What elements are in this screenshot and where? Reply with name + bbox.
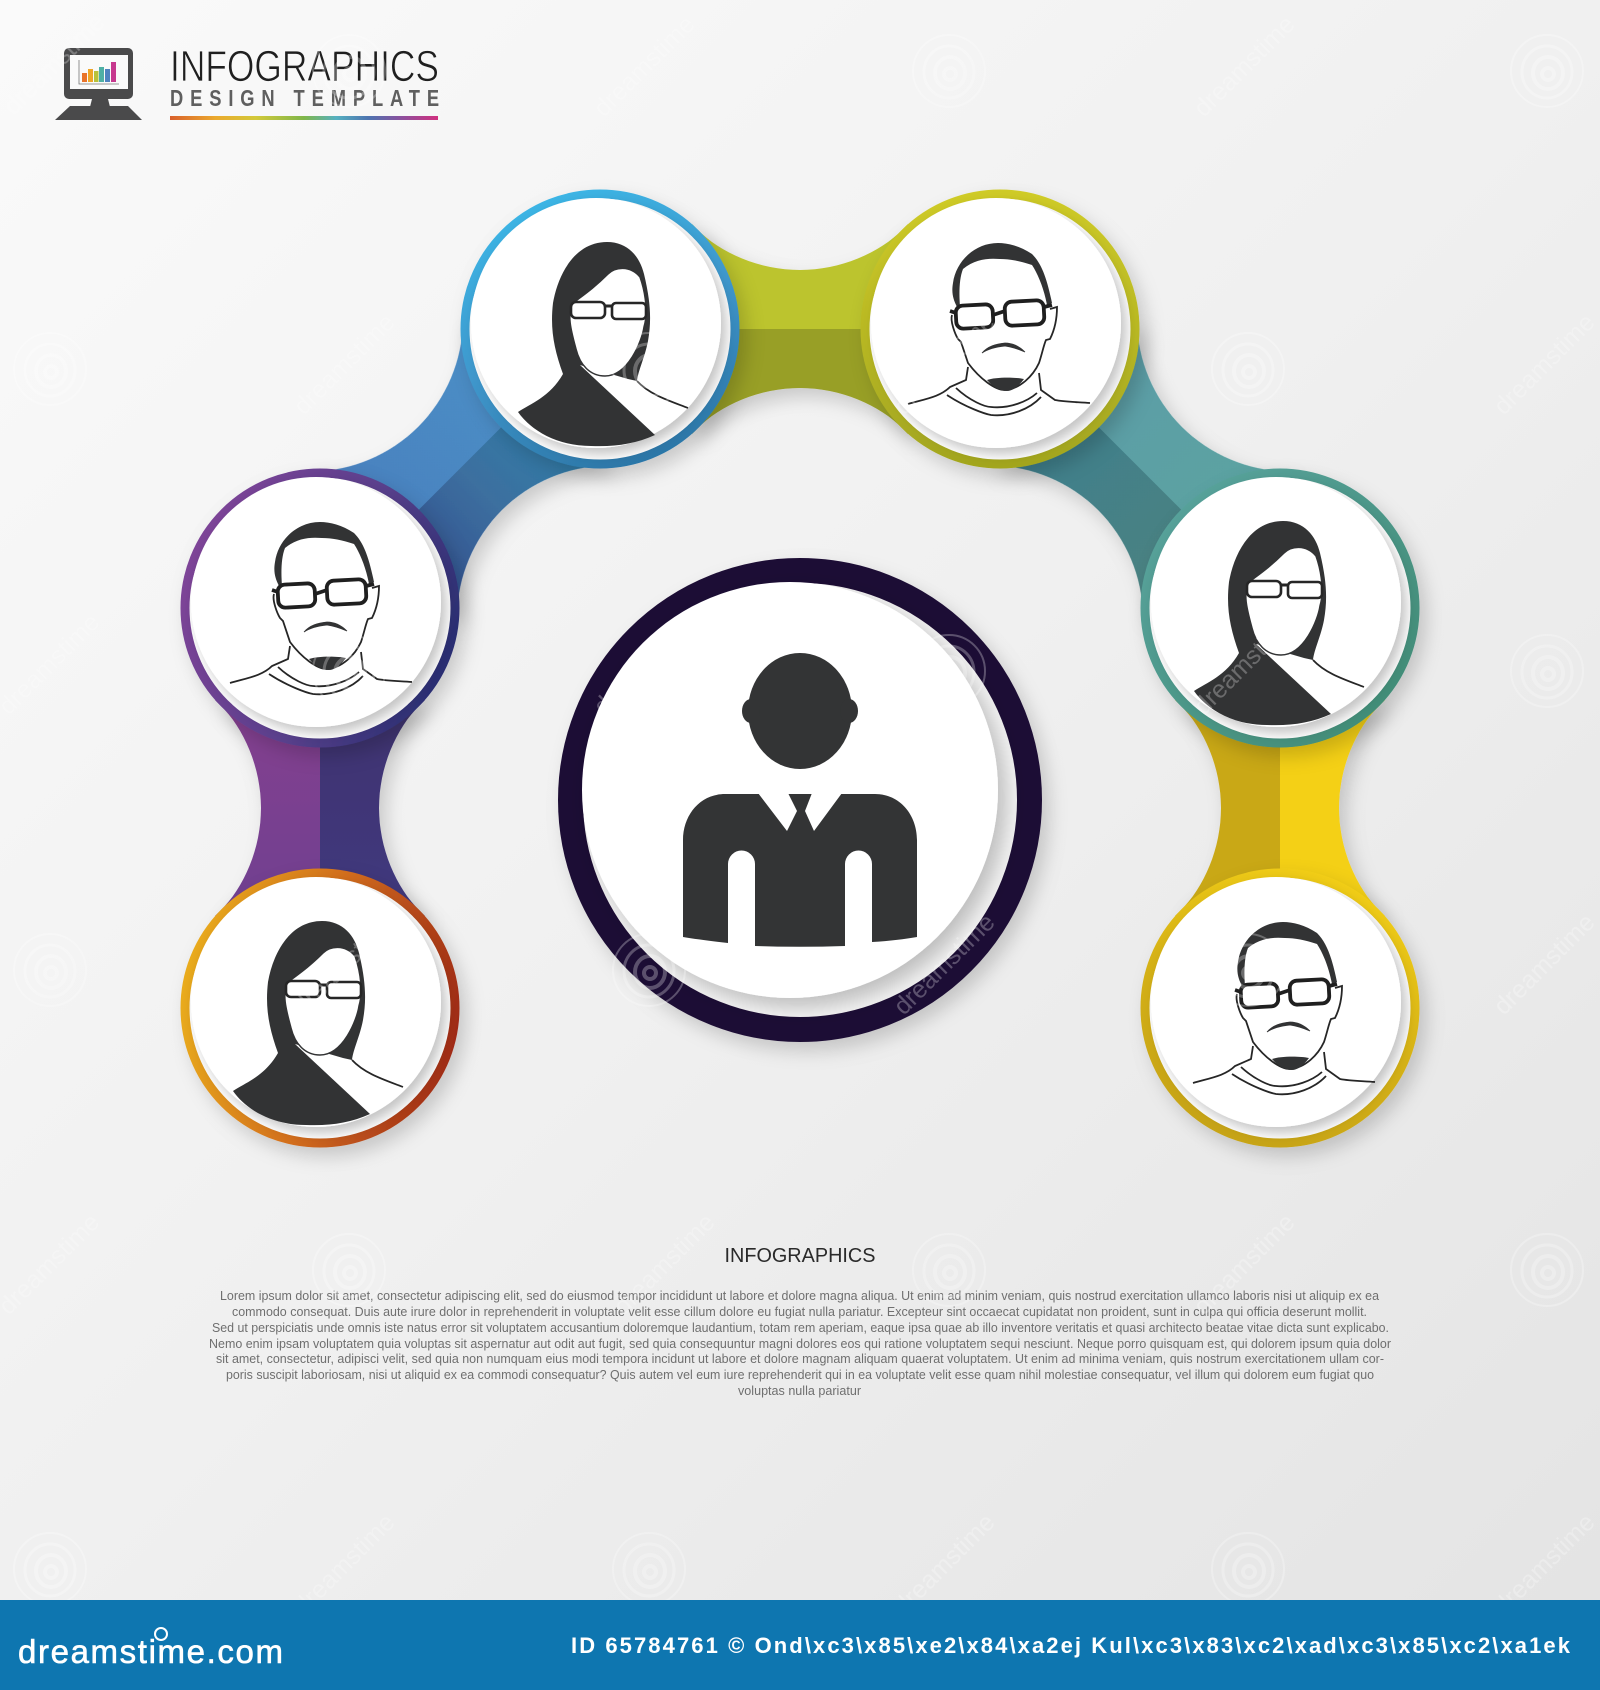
center ring (570, 570, 1030, 1030)
watermark pattern: dreamstime (1488, 1508, 1600, 1620)
node: woman bottom left, orange ring (185, 873, 455, 1143)
connector: blue (309, 318, 611, 619)
connector: purple (215, 700, 425, 916)
watermark pattern: dreamstime (588, 10, 700, 122)
connector: olive (692, 224, 908, 434)
connector: yellow (1175, 700, 1385, 916)
body paragraph: Nemo enim ipsam voluptatem quia voluptas sit aspernatur aut odit aut fugit, sed quia consequuntur magni dolores eos qui ratione voluptatem sequi nesciunt. Neque porro quisquam est, qui dolorem ipsum quia dolor (209, 1337, 1391, 1351)
node: woman top left, blue ring (465, 194, 735, 464)
connector: teal (989, 318, 1291, 619)
footer credit text: ID 65784761 © Ond\xc3\x85\xe2\x84\xa2ej Kul\xc3\x83\xc2\xad\xc3\x85\xc2\xa1ek (571, 1633, 1571, 1658)
node: man top right, olive ring (865, 194, 1135, 464)
rainbow rule (170, 116, 438, 120)
body paragraph: poris suscipit laboriosam, nisi ut aliquid ex ea commodi consequatur? Quis autem vel eum iure reprehenderit qui in ea voluptate velit esse quam nihil molestiae consequatur, vel illum qui dolorem eum fugiat quo (226, 1368, 1374, 1382)
body paragraph: commodo consequat. Duis aute irure dolor in reprehenderit in voluptate velit esse cillum dolore eu fugiat nulla pariatur. Excepteur sint occaecat cupidatat non proident, sunt in culpa qui officia deserunt mollit. (232, 1305, 1367, 1319)
heading: INFOGRAPHICS: INFOGRAPHICS (170, 42, 439, 91)
text heading: INFOGRAPHICS (724, 1245, 876, 1267)
footer brand: dreamstime.com: dreamstime.com (18, 1633, 283, 1670)
watermark pattern: dreamstime (1488, 308, 1600, 420)
body paragraph (209, 1289, 1391, 1398)
footer bar (0, 1600, 1600, 1690)
text block (209, 1245, 1391, 1398)
icon: computer monitor with bar chart (55, 48, 142, 120)
watermark pattern: dreamstime (888, 308, 1000, 420)
arch diagram of people (185, 194, 1415, 1143)
connectors chain (215, 224, 1385, 916)
watermark pattern: dreamstime (1188, 608, 1300, 720)
watermark pattern: dreamstime (1188, 10, 1300, 122)
body paragraph: sit amet, consectetur, adipisci velit, sed quia non numquam eius modi tempora incidunt ut labore et dolore magnam aliquam quaerat voluptatem. Ut enim ad minima veniam, quis nostrum exercitationem ullam cor- (216, 1352, 1384, 1366)
node: woman right, teal ring (1145, 473, 1415, 743)
watermark pattern: dreamstime (288, 308, 400, 420)
subheading: DESIGN TEMPLATE: DESIGN TEMPLATE (170, 86, 439, 112)
watermark pattern: dreamstime (0, 8, 110, 120)
node: man bottom right, yellow ring (1145, 873, 1415, 1143)
center white disc (582, 582, 998, 998)
watermark pattern: dreamstime (1488, 908, 1600, 1020)
body paragraph: Sed ut perspiciatis unde omnis iste natus error sit voluptatem accusantium doloremque laudantium, totam rem aperiam, eaque ipsa quae ab illo inventore veritatis et quasi architecto beatae vitae dicta sunt explicabo. (212, 1321, 1389, 1335)
icon: businessman (683, 653, 917, 947)
watermark pattern: dreamstime (608, 1208, 720, 1320)
watermark pattern: dreamstime (288, 908, 400, 1020)
watermark pattern: dreamstime (288, 1508, 400, 1620)
header logo lockup (55, 42, 439, 120)
body paragraph: Lorem ipsum dolor sit amet, consectetur adipiscing elit, sed do eiusmod tempor incididunt ut labore et dolore magna aliqua. Ut enim ad minim veniam, quis nostrud exercitation ullamco laboris nisi ut aliquip ex ea (220, 1289, 1379, 1303)
watermark pattern: dreamstime (888, 1508, 1000, 1620)
watermark pattern: dreamstime (588, 608, 700, 720)
center node: businessman (570, 570, 1030, 1030)
body paragraph: voluptas nulla pariatur (738, 1384, 861, 1398)
watermark pattern: dreamstime (888, 908, 1000, 1020)
node: man left, purple ring (185, 473, 455, 743)
watermark pattern: dreamstime (1188, 1208, 1300, 1320)
